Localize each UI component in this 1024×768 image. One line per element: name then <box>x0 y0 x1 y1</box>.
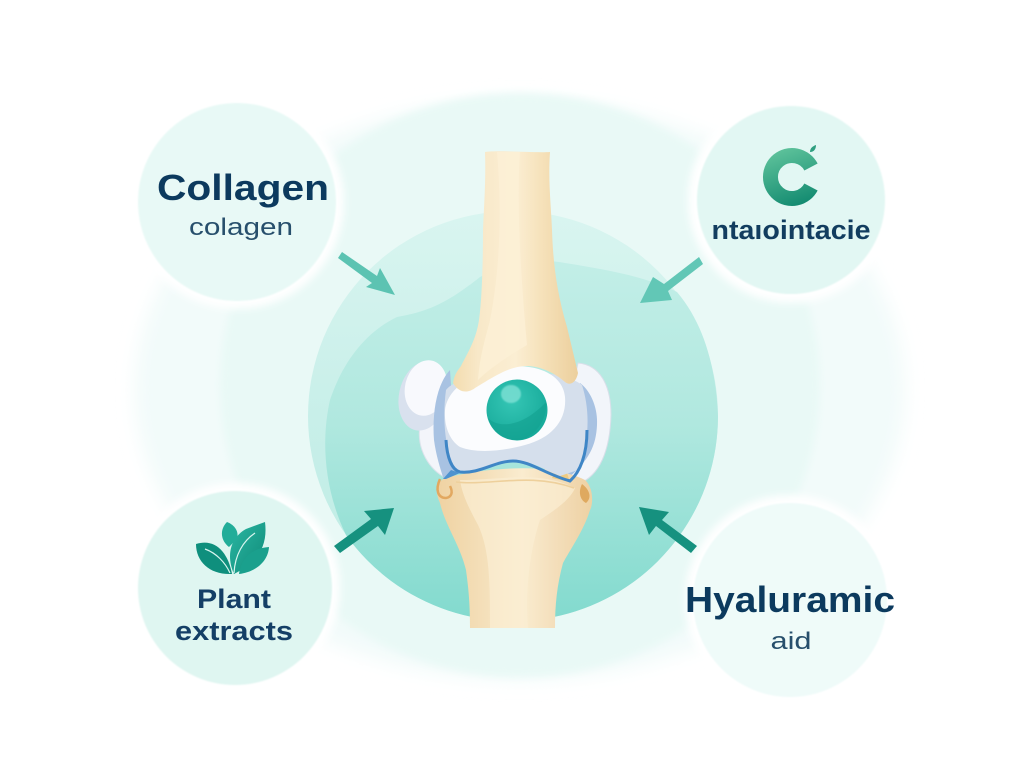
arrow: hyaluronic acid to joint <box>639 507 697 553</box>
arrow: plant extracts to joint <box>334 508 394 553</box>
left blue membrane <box>434 370 455 480</box>
joint capsule <box>444 372 588 476</box>
teal cartilage ball <box>486 380 548 440</box>
lower bone <box>437 468 592 628</box>
vitamin C circle <box>697 106 885 294</box>
arrow: vitamin C to joint <box>640 257 703 303</box>
hyaluronic acid circle <box>693 503 887 697</box>
bone highlight <box>478 152 527 380</box>
collagen circle <box>138 103 336 301</box>
collagen subtitle: colagen <box>189 214 293 241</box>
plant extracts label: Plant <box>197 584 271 614</box>
upper bone <box>453 151 578 392</box>
panel: vitamin C <box>697 106 885 294</box>
hyaluronic heading: Hyaluramic <box>685 579 895 620</box>
white halos around the nutrient circles <box>130 95 895 705</box>
left kneecap pad <box>392 356 455 478</box>
joint blue outline <box>446 430 587 481</box>
plant extracts circle <box>138 491 332 685</box>
central teal circle <box>308 211 718 621</box>
panel: plant extracts: extracts <box>175 616 293 646</box>
vitamin C label: ntaıointacie <box>712 215 870 245</box>
arrow: collagen to joint <box>338 252 395 295</box>
collagen heading: Collagen <box>157 167 329 208</box>
soft background blob <box>135 93 905 680</box>
panel: hyaluronic acid <box>685 503 895 697</box>
icon: letter C with leaf <box>770 145 816 198</box>
right pad <box>556 363 611 484</box>
panel: collagen <box>138 103 336 301</box>
inner wave shade <box>325 261 718 621</box>
hyaluronic subtitle: aid <box>770 628 812 655</box>
icon: leaves <box>196 522 269 574</box>
panel: plant extracts <box>138 491 332 685</box>
knee joint illustration <box>392 151 611 628</box>
